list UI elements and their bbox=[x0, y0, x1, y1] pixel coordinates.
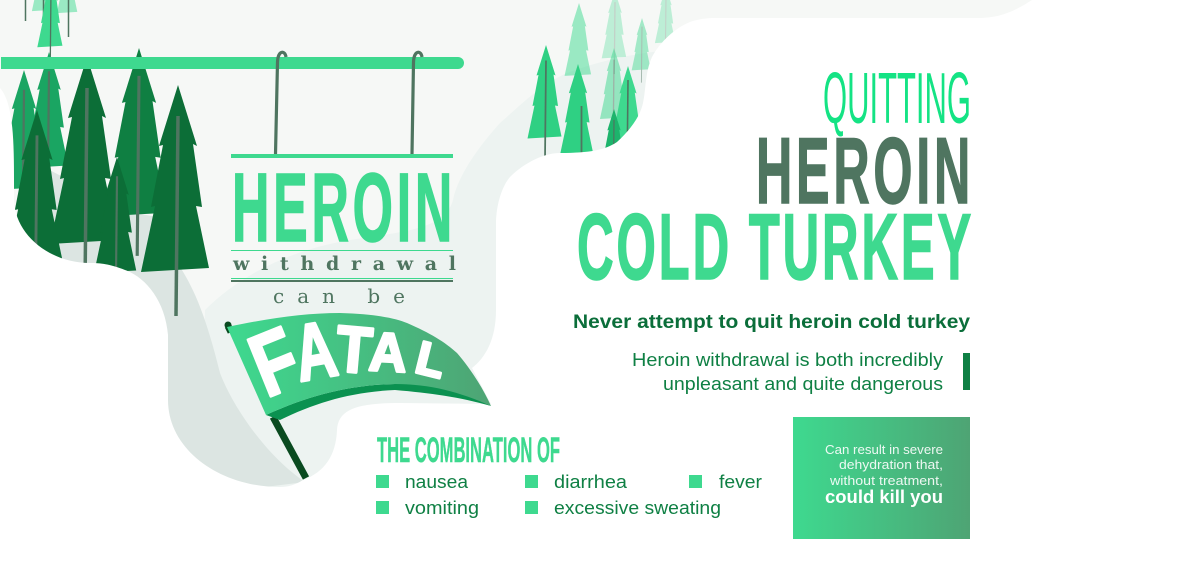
item: diarrhea bbox=[525, 472, 628, 492]
distant trunk 2 bbox=[42, 0, 44, 30]
tree: dark left bbox=[7, 110, 62, 299]
text: QUITTING bbox=[823, 59, 971, 139]
flag word bbox=[236, 303, 451, 415]
tree: dark large bbox=[50, 57, 118, 288]
callout line 2: dehydration that, bbox=[839, 458, 943, 472]
tree: pale 1 bbox=[565, 3, 591, 76]
tree: pale 5 bbox=[600, 48, 626, 136]
left hook bbox=[276, 52, 286, 154]
item: fever bbox=[689, 472, 762, 492]
item: nausea: nausea bbox=[405, 472, 469, 492]
symptoms list: THE COMBINATION OF bbox=[377, 431, 560, 470]
callout box bbox=[793, 417, 970, 539]
tree: front left bbox=[528, 45, 562, 160]
sign thin rule bbox=[231, 250, 453, 251]
tree: dark small bbox=[94, 157, 136, 300]
tree: dark right bbox=[141, 85, 209, 316]
title bbox=[577, 59, 974, 299]
trees: top right grove bbox=[528, 0, 675, 190]
description bbox=[632, 350, 943, 394]
tree: pale 3 bbox=[655, 0, 675, 56]
flag pole cap bbox=[224, 322, 232, 328]
tree: front right bbox=[611, 66, 642, 170]
flag shadow strip bbox=[266, 384, 491, 420]
callout background bbox=[793, 417, 970, 539]
description line 2: unpleasant and quite dangerous bbox=[663, 374, 943, 394]
tree: pale 2 bbox=[602, 0, 626, 74]
sign top rule bbox=[231, 154, 453, 158]
item: vomiting: vomiting bbox=[405, 498, 479, 518]
item: excessive sweating: excessive sweating bbox=[554, 498, 721, 518]
trunk: front mid bbox=[580, 106, 582, 153]
background: darker slope bbox=[20, 165, 305, 500]
flag: FATAL bbox=[224, 303, 491, 478]
distant trunk 3 bbox=[68, 0, 70, 37]
letter T: T bbox=[333, 313, 375, 388]
item: fever: fever bbox=[719, 472, 762, 492]
background: light slope bbox=[200, 48, 700, 500]
letter A: A bbox=[287, 303, 343, 399]
letter F: F bbox=[236, 308, 313, 415]
description accent bar bbox=[963, 353, 970, 390]
tree: front mid bbox=[560, 64, 593, 154]
callout line 1: Can result in severe bbox=[825, 443, 943, 457]
callout emphasis: could kill you bbox=[825, 487, 943, 507]
symptoms list bbox=[376, 431, 762, 518]
tree: mid green back bbox=[0, 70, 44, 218]
trees: top left distant bbox=[26, 0, 77, 63]
hanging sign bbox=[231, 153, 456, 308]
trees: left forest bbox=[0, 48, 209, 316]
distant trunk 1 bbox=[24, 0, 26, 21]
hanging bar bbox=[1, 57, 464, 69]
sign heading: HEROIN bbox=[232, 153, 456, 262]
tree: mid green tall bbox=[26, 52, 68, 195]
description line 1: Heroin withdrawal is both incredibly bbox=[632, 350, 943, 370]
tree: distant solid bbox=[37, 0, 62, 63]
letter A: A bbox=[368, 322, 408, 384]
title line: heroin: HEROIN bbox=[756, 118, 974, 223]
letter L: L bbox=[411, 331, 451, 388]
sign double rule bbox=[231, 278, 453, 282]
sign words: can be: can be bbox=[273, 284, 405, 308]
tree: forest green tall bbox=[106, 48, 167, 256]
tree: distant pale right bbox=[57, 0, 77, 13]
item: diarrhea: diarrhea bbox=[554, 472, 628, 492]
tree: distant pale left bbox=[32, 0, 52, 11]
subheading: Never attempt to quit heroin cold turkey bbox=[573, 312, 970, 333]
callout text bbox=[825, 443, 943, 507]
flag cloth bbox=[227, 313, 491, 415]
sign word: withdrawal: withdrawal bbox=[232, 253, 456, 275]
item: vomiting bbox=[376, 498, 479, 518]
tree: darker small bbox=[601, 109, 625, 190]
tree: pale 4 bbox=[632, 18, 651, 83]
flag pole bbox=[228, 326, 306, 478]
item: nausea bbox=[376, 472, 469, 492]
right hook bbox=[412, 52, 422, 154]
callout line 3: without treatment, bbox=[829, 474, 943, 488]
